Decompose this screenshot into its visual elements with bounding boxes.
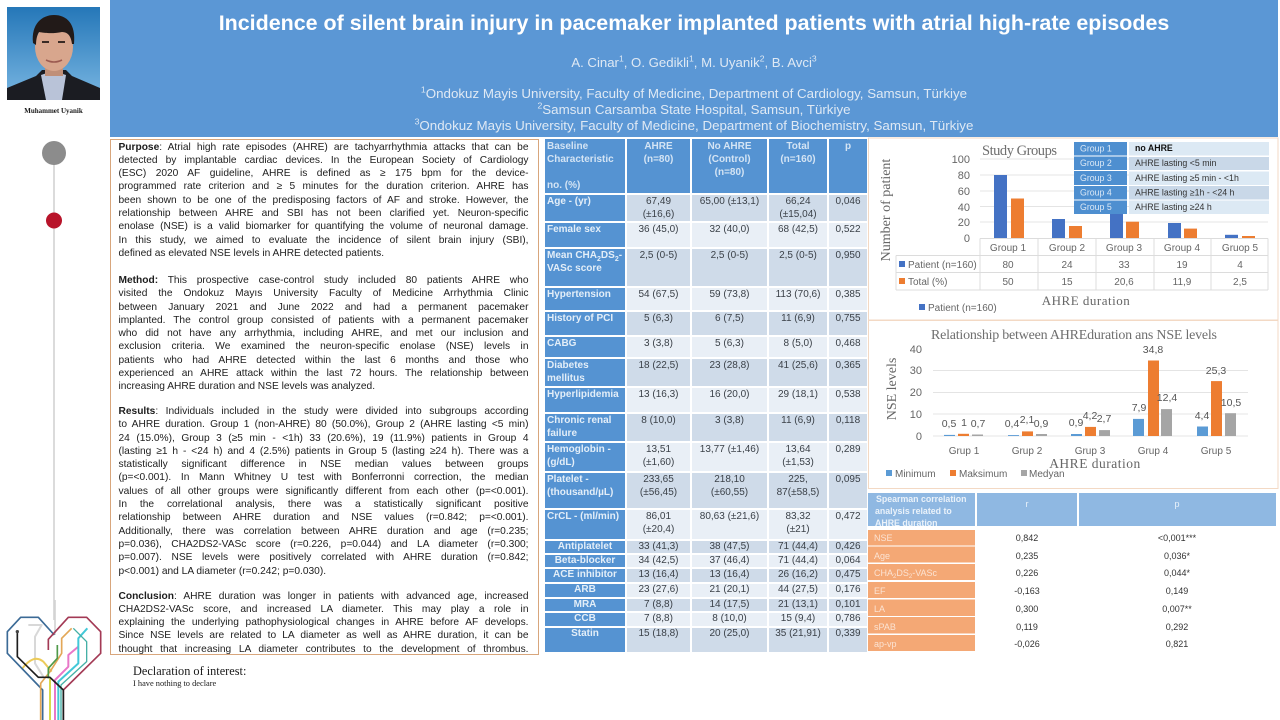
table: baseline characteristics: ARB — [574, 584, 596, 595]
table: baseline characteristics: 34 (42,5) — [638, 555, 679, 566]
r values: 0,300 — [1016, 604, 1038, 614]
text block: method: exclusion criteria. We examined the neuron-specific enolase (NSE) levels in — [118, 341, 528, 352]
table: baseline characteristics: Characteristic — [547, 154, 614, 165]
panel: study groups chart — [868, 138, 1278, 320]
text block: conclusion: Since NSE levels are related to LA diameter as well as AHRE duration, it can be — [118, 630, 528, 641]
table: baseline characteristics: 0,950 — [835, 250, 861, 261]
text block: results: Additionally, there was correlation between AHRE duration and age (r=0.235; — [118, 526, 528, 537]
declaration of interest: I have nothing to declare — [133, 679, 216, 688]
table: baseline characteristics: Baseline — [547, 141, 588, 152]
data table under chart: Group 4 — [1164, 243, 1201, 254]
table: baseline characteristics: 11 (6,9) — [781, 313, 815, 324]
text block: results: p<0.001) and LA diameter (r=0.242; p=0.030). — [118, 566, 326, 577]
data table under chart: Group 1 — [990, 243, 1027, 254]
table: baseline characteristics: 65,00 (±13,1) — [700, 196, 759, 207]
row label cells — [868, 530, 975, 651]
table header — [868, 493, 1276, 528]
p values: 0,292 — [1166, 622, 1188, 632]
text block: method: implanted. The control group consisted of patients with a permanent pacemaker — [118, 315, 528, 326]
table: baseline characteristics: 3 (3,8) — [715, 415, 744, 426]
table: baseline characteristics: 7 (8,8) — [644, 599, 673, 610]
y axis and gridlines: 30 — [910, 365, 922, 377]
table: baseline characteristics: 66,24 — [785, 196, 811, 207]
table: baseline characteristics: 26 (16,2) — [778, 569, 818, 580]
table: baseline characteristics: 29 (18,1) — [778, 389, 818, 400]
table: baseline characteristics: 68 (42,5) — [778, 224, 818, 235]
table: baseline characteristics: 8 (10,0) — [712, 613, 747, 624]
table: baseline characteristics: (±15,04) — [779, 209, 817, 220]
table: baseline characteristics: No AHRE — [707, 141, 752, 152]
text block: purpose: relationship between AHRE and SBI has not been clarified yet. Neuron-specific — [118, 208, 528, 219]
text block: results: values of all other groups were significantly different from each other (p=<0.001). — [118, 486, 528, 497]
header banner — [110, 0, 1278, 137]
affiliations: 2Samsun Carsamba State Hospital, Samsun, Türkiye — [537, 101, 851, 117]
category labels: Grup 1 — [949, 446, 980, 457]
data labels: 4,2 — [1083, 410, 1097, 422]
table: baseline characteristics: 0,426 — [835, 541, 861, 552]
table: baseline characteristics: CCB — [574, 613, 596, 624]
table: baseline characteristics: 13 (16,4) — [638, 569, 679, 580]
table: baseline characteristics: (g/dL) — [547, 457, 575, 468]
table: baseline characteristics: (n=160) — [780, 154, 816, 165]
category labels: Grup 5 — [1201, 446, 1232, 457]
table: baseline characteristics: 233,65 — [643, 474, 674, 485]
group definitions legend: Group 4 — [1080, 188, 1112, 198]
row label cells: DS — [896, 568, 909, 578]
y axis and gridlines — [952, 154, 1268, 245]
data labels: 2,1 — [1020, 414, 1034, 426]
table: baseline characteristics: Hyperlipidemia — [547, 389, 619, 400]
table: baseline characteristics: Total — [786, 141, 810, 152]
table: baseline characteristics: (±21) — [786, 524, 810, 535]
row label cells: EF — [874, 586, 886, 596]
group definitions legend: Group 3 — [1080, 173, 1112, 183]
table: baseline characteristics: (n=80) — [644, 154, 673, 165]
table: baseline characteristics: 71 (44,4) — [778, 541, 818, 552]
group definitions legend: Group 2 — [1080, 158, 1112, 168]
data labels: 34,8 — [1143, 344, 1163, 356]
affiliations — [415, 85, 973, 133]
table: baseline characteristics: 0,064 — [835, 555, 861, 566]
p values: 0,821 — [1166, 639, 1188, 649]
data table under chart: Patient (n=160) — [908, 260, 977, 271]
r values: 0,842 — [1016, 533, 1038, 543]
data labels: 0,7 — [971, 418, 985, 430]
text block: results: In the correlational analysis, there was a statistically significant positive — [118, 499, 528, 510]
table: baseline characteristics: 13,64 — [785, 444, 811, 455]
data table under chart: 11,9 — [1173, 277, 1192, 288]
table: baseline characteristics: 0,472 — [835, 511, 861, 522]
data labels: 7,9 — [1132, 402, 1146, 414]
table: baseline characteristics: 113 (70,6) — [776, 289, 820, 300]
data table under chart: 33 — [1118, 260, 1130, 271]
text block: results — [118, 406, 529, 577]
text block: conclusion: Conclusion: AHRE duration was longer in patients with advanced age, increased — [118, 590, 528, 602]
data table under chart: 80 — [1002, 260, 1014, 271]
table: baseline characteristics: 38 (47,5) — [709, 541, 750, 552]
data labels: 10,5 — [1221, 397, 1241, 409]
data table under chart: Group 2 — [1049, 243, 1086, 254]
group definitions legend: AHRE lasting ≥1h - <24 h — [1135, 188, 1235, 198]
chart legend: Minimum — [895, 469, 936, 480]
text block: results: Results: Individuals included in the study were divided into subgroups according — [118, 406, 528, 417]
text block: purpose: In this study, we aimed to evaluate the incidence of silent brain injury (SBI), — [118, 235, 528, 246]
text block: method: visited the Ondokuz Mayıs University Faculty of Medicine Arrhythmia Clinic — [118, 288, 528, 299]
table: baseline characteristics: no. (%) — [547, 180, 580, 191]
table: baseline characteristics: 87(±58,5) — [777, 487, 819, 498]
y axis and gridlines: 20 — [910, 387, 922, 399]
table: baseline characteristics: 2,5 (0-5) — [640, 250, 677, 261]
table: baseline characteristics: 0,755 — [835, 313, 861, 324]
data labels: 4,4 — [1195, 410, 1209, 422]
table: baseline characteristics: 21 (13,1) — [778, 599, 818, 610]
table: baseline characteristics: Beta-blocker — [555, 555, 615, 566]
data table under chart: 20,6 — [1114, 277, 1134, 288]
r values: 0,119 — [1016, 622, 1038, 632]
table header: Spearman correlation — [876, 494, 966, 504]
text block: conclusion — [118, 590, 528, 655]
r values: -0,163 — [1014, 586, 1040, 596]
table: baseline characteristics: 71 (44,4) — [778, 555, 818, 566]
text block: method: increasing AHRE duration and NSE levels was analyzed. — [118, 381, 375, 392]
text block: results: relationship between AHRE duration and NSE values (r=0.842; p=<0.001). — [118, 512, 528, 523]
title: Incidence of silent brain injury in pacemaker implanted patients with atrial high-rate episodes — [219, 11, 1169, 35]
x axis title: AHRE duration — [1042, 293, 1130, 308]
row label cells: NSE — [874, 533, 893, 543]
data table under chart: 15 — [1061, 277, 1073, 288]
text block: purpose: (ESC) 2020 AF guideline, AHRE is defined as ≥ 175 bpm for the device- — [118, 168, 528, 179]
text block: results: p=0.036), CHA2DS2-VASc score (r=0.226, p=0.044) and LA diameter (r=0.300; — [118, 539, 528, 550]
table: baseline characteristics: 16 (20,0) — [709, 389, 750, 400]
r values — [1014, 533, 1040, 649]
row label cells: sPAB — [874, 622, 896, 632]
table: baseline characteristics: 8 (10,0) — [641, 415, 676, 426]
chart title: Relationship between AHREduration ans NSE levels — [931, 328, 1217, 343]
table: baseline characteristics: Statin — [571, 628, 599, 639]
y axis and gridlines: 10 — [910, 409, 922, 421]
row label cells: LA — [874, 604, 885, 614]
table: baseline characteristics: 218,10 — [714, 474, 745, 485]
data labels: 25,3 — [1206, 365, 1226, 377]
text block: method: Method: This prospective case-control study included 80 patients AHRE who — [118, 275, 528, 286]
table: baseline characteristics: 83,32 — [785, 511, 811, 522]
table: baseline characteristics: 86,01 — [646, 511, 671, 522]
table: baseline characteristics: AHRE — [644, 141, 673, 152]
data table under chart — [896, 238, 1268, 290]
y axis and gridlines: 0 — [916, 431, 922, 443]
text block: purpose: enolase (NSE) is a valid biomarker for quantifying the volume of neuronal damage. — [118, 221, 528, 232]
data table under chart: Total (%) — [908, 277, 947, 288]
table: baseline characteristics: mellitus — [547, 373, 585, 384]
text block: purpose: been shown to be one of the predisposing factors of AF and stroke. However, the — [118, 195, 528, 206]
text block: results: (p=<0.001). In Mann Whitney U test with Bonferronni correction, the median — [118, 472, 528, 483]
data labels: 0,9 — [1034, 418, 1048, 430]
table: baseline characteristics: 23 (28,8) — [709, 360, 750, 371]
group definitions legend: Group 1 — [1080, 144, 1112, 154]
text block: purpose: detected by implantable cardiac devices. In the European Society of Cardiology — [118, 155, 528, 166]
bars — [944, 360, 1236, 436]
table: baseline characteristics: 14 (17,5) — [709, 599, 750, 610]
text block: method — [118, 275, 528, 392]
table: baseline characteristics: 35 (21,91) — [775, 628, 821, 639]
panel: NSE levels chart — [868, 320, 1278, 489]
group definitions legend — [1074, 142, 1269, 214]
table: baseline characteristics: Age - (yr) — [547, 196, 591, 207]
table: baseline characteristics: (Control) — [708, 154, 751, 165]
table: baseline characteristics: History of PCI — [547, 313, 613, 324]
y axis and gridlines: 100 — [952, 154, 970, 166]
text block: results: statistically significant difference in NSE median values between groups — [118, 459, 528, 470]
table: baseline characteristics: 44 (27,5) — [778, 584, 818, 595]
x axis title: AHRE duration — [1049, 456, 1141, 471]
table: baseline characteristics: (±56,45) — [640, 487, 677, 498]
table: baseline characteristics: 0,118 — [836, 415, 860, 426]
text block: conclusion: thought that increasing LA diameter contributes to the development of thrombus. — [118, 644, 528, 655]
data labels — [942, 344, 1241, 430]
text block: results: to AHRE duration. Group 1 (non-AHRE) 80 (50.0%), Group 2 (AHRE lasting <5 min) — [118, 419, 528, 430]
r values: -0,026 — [1014, 639, 1040, 649]
table: baseline characteristics: 13 (16,4) — [709, 569, 750, 580]
table: baseline characteristics: Diabetes — [547, 360, 589, 371]
table: baseline characteristics: 8 (5,0) — [784, 338, 812, 349]
table: baseline characteristics: 59 (73,8) — [709, 289, 750, 300]
group definitions legend: AHRE lasting ≥5 min - <1h — [1135, 173, 1239, 183]
table: baseline characteristics: 15 (9,4) — [781, 613, 815, 624]
icon: timeline with markers — [42, 141, 66, 620]
text block: results: (lasting ≥1 h - <24 h) and 4 (2.5%) patients in Group 5 (lasting ≥24 h). There was a — [118, 446, 528, 457]
table header: AHRE duration — [875, 518, 938, 528]
affiliations: 1Ondokuz Mayis University, Faculty of Medicine, Department of Cardiology, Samsun, Türkiye — [421, 85, 967, 101]
data labels: 12,4 — [1157, 392, 1177, 404]
data table under chart: Gruop 5 — [1222, 243, 1259, 254]
table: baseline characteristics — [545, 139, 867, 652]
category labels — [949, 446, 1232, 457]
table: baseline characteristics: 54 (67,5) — [638, 289, 679, 300]
row label cells: Age — [874, 551, 890, 561]
table: baseline characteristics: 5 (6,3) — [644, 313, 673, 324]
table: baseline characteristics: 18 (22,5) — [638, 360, 679, 371]
row label cells: 2 — [893, 574, 897, 580]
bars — [994, 175, 1255, 238]
declaration of interest — [133, 664, 246, 688]
y axis and gridlines: 0 — [964, 233, 970, 245]
y axis and gridlines: 40 — [958, 202, 970, 214]
table: baseline characteristics: 33 (41,3) — [638, 541, 679, 552]
table: baseline characteristics: 0,046 — [835, 196, 861, 207]
row label cells: -VASc — [912, 568, 938, 578]
chart legend: Medyan — [1029, 469, 1065, 480]
table: baseline characteristics: 6 (7,5) — [715, 313, 744, 324]
text block: method: between January 2021 and June 2022 and had a permanent pacemaker — [118, 302, 528, 313]
table: baseline characteristics: Antiplatelet — [558, 541, 612, 552]
table: baseline characteristics: (thousand/µL) — [547, 487, 613, 498]
text block: purpose: programmed rate criterion and ≥ 5 minutes for the duration criterion. AHRE has — [118, 181, 528, 192]
declaration of interest: Declaration of interest: — [133, 664, 246, 678]
authors: A. Cinar1, O. Gedikli1, M. Uyanik2, B. Avci3 — [571, 54, 817, 70]
data labels: 0,4 — [1005, 418, 1019, 430]
text block: method: patients who had AHRE detected within the last 6 months and those who — [118, 355, 528, 366]
text block: purpose — [118, 142, 528, 259]
table: baseline characteristics: 37 (46,4) — [709, 555, 750, 566]
table: baseline characteristics: 225, — [788, 474, 808, 485]
table: baseline characteristics: 13 (16,3) — [638, 389, 679, 400]
y axis and gridlines: 60 — [958, 186, 970, 198]
table: baseline characteristics: CrCL - (ml/min) — [547, 511, 619, 522]
table: baseline characteristics: 15 (18,8) — [638, 628, 679, 639]
chart legend — [886, 469, 1065, 480]
chart title: Study Groups — [982, 143, 1057, 159]
p values: 0,044* — [1164, 568, 1191, 578]
table: baseline characteristics: 13,51 — [646, 444, 671, 455]
icon: heart of coloured lines logo — [6, 600, 102, 720]
table: baseline characteristics: 5 (6,3) — [715, 338, 744, 349]
table: baseline characteristics: (±1,53) — [782, 457, 814, 468]
data labels: 0,5 — [942, 418, 956, 430]
table: baseline characteristics: p — [845, 141, 851, 152]
category labels: Grup 4 — [1138, 446, 1169, 457]
category labels: Grup 2 — [1012, 446, 1043, 457]
table: baseline characteristics: (±1,60) — [643, 457, 674, 468]
table: baseline characteristics: Chronic renal — [547, 415, 611, 426]
presenter name: Muhammet Uyanik — [24, 107, 83, 115]
y axis and gridlines: 40 — [910, 344, 922, 356]
chart legend: Patient (n=160) — [928, 303, 997, 314]
group definitions legend: AHRE lasting ≥24 h — [1135, 202, 1212, 212]
text block: conclusion: explaining the underlying pathophysiological changes in AHRE before AF develops. — [118, 617, 528, 628]
data labels: 1 — [961, 417, 967, 429]
table: baseline characteristics: 0,095 — [835, 474, 861, 485]
data labels: 0,9 — [1069, 417, 1083, 429]
table: baseline characteristics: 0,475 — [835, 569, 861, 580]
table: baseline characteristics: 11 (6,9) — [781, 415, 815, 426]
table: baseline characteristics: MRA — [574, 599, 596, 610]
data table under chart: Group 3 — [1106, 243, 1143, 254]
table: baseline characteristics: 32 (40,0) — [709, 224, 750, 235]
p values: 0,149 — [1166, 586, 1188, 596]
chart legend: Maksimum — [959, 469, 1007, 480]
table: baseline characteristics: 36 (45,0) — [638, 224, 679, 235]
table: baseline characteristics: Hemoglobin - — [547, 444, 611, 455]
text block: results: p=0.007). NSE levels were positively correlated with AHRE duration (r=0.842; — [118, 552, 528, 563]
table: baseline characteristics: (±20,4) — [643, 524, 674, 535]
table header: p — [1174, 499, 1180, 509]
table: baseline characteristics: 2,5 (0-5) — [779, 250, 817, 261]
table: baseline characteristics: CABG — [547, 338, 576, 349]
table: baseline characteristics: (±60,55) — [711, 487, 748, 498]
table: baseline characteristics: Platelet - — [547, 474, 589, 485]
table: baseline characteristics: 67,49 — [646, 196, 671, 207]
table: baseline characteristics: 0,101 — [835, 599, 861, 610]
table: baseline characteristics: 7 (8,8) — [644, 613, 673, 624]
table: baseline characteristics: Female sex — [547, 224, 601, 235]
text block: conclusion: CHA2DS2-VASc score, and increased LA diameter. This may play a role in — [118, 604, 528, 615]
table: baseline characteristics: Mean CHA2DS2- — [547, 250, 622, 263]
table: baseline characteristics: 13,77 (±1,46) — [700, 444, 759, 455]
table: baseline characteristics: 20 (25,0) — [709, 628, 750, 639]
p values: <0,001*** — [1158, 533, 1197, 543]
table: baseline characteristics: 3 (3,8) — [644, 338, 673, 349]
table: baseline characteristics: 0,385 — [835, 289, 861, 300]
affiliations: 3Ondokuz Mayis University, Faculty of Medicine, Department of Biochemistry, Samsun, Türkiye — [415, 117, 973, 133]
table: baseline characteristics: Hypertension — [547, 289, 611, 300]
table: baseline characteristics: 0,339 — [835, 628, 861, 639]
row label cells: 2 — [909, 574, 913, 580]
p values: 0,036* — [1164, 551, 1191, 561]
data table under chart: 4 — [1237, 260, 1243, 271]
table header: r — [1026, 499, 1028, 509]
text block: purpose: defined as elevated NSE levels in AHRE detected patients. — [118, 248, 384, 259]
table header: analysis related to — [875, 506, 952, 516]
group definitions legend: no AHRE — [1135, 143, 1173, 153]
data labels: 2,7 — [1097, 413, 1111, 425]
y axis and gridlines: 80 — [958, 170, 970, 182]
category labels: Grup 3 — [1075, 446, 1106, 457]
p values — [1158, 533, 1197, 649]
text block: method: who did not have any arrhythmia, including AHRE, and met our inclusion and — [118, 328, 528, 339]
group definitions legend: Group 5 — [1080, 202, 1112, 212]
table: baseline characteristics: 0,365 — [835, 360, 861, 371]
table: baseline characteristics: 0,786 — [835, 613, 861, 624]
y axis and gridlines — [910, 344, 1248, 443]
table: baseline characteristics: 0,522 — [835, 224, 861, 235]
table: baseline characteristics: 0,176 — [835, 584, 861, 595]
table: baseline characteristics: (n=80) — [715, 167, 744, 178]
table: baseline characteristics: 0,289 — [835, 444, 861, 455]
row label cells: ap-vp — [874, 639, 897, 649]
y axis title: Number of patient — [879, 159, 894, 261]
table: baseline characteristics: ACE inhibitor — [553, 569, 617, 580]
panel: abstract text — [110, 139, 539, 655]
table: baseline characteristics: 2,5 (0-5) — [711, 250, 748, 261]
y axis and gridlines: 20 — [958, 217, 970, 229]
table: baseline characteristics: 0,538 — [835, 389, 861, 400]
r values: 0,235 — [1016, 551, 1038, 561]
table: baseline characteristics: 41 (25,6) — [778, 360, 818, 371]
table: baseline characteristics: 23 (27,6) — [638, 584, 679, 595]
y axis title: NSE levels — [885, 358, 900, 420]
group definitions legend: AHRE lasting <5 min — [1135, 158, 1217, 168]
table: Spearman correlation analysis — [868, 493, 1276, 651]
table: baseline characteristics: 80,63 (±21,6) — [700, 511, 759, 522]
text block: method: experienced an AHRE attack within the last 72 hours. The relationship between — [118, 368, 528, 379]
table: baseline characteristics: 21 (20,1) — [709, 584, 750, 595]
text block: results: 24 (15.0%), Group 3 (≥5 min - <1h) 33 (20.6%), 19 (11.9%) patients in Group 4 — [118, 433, 528, 444]
row label cells: CHA — [874, 568, 893, 578]
table: baseline characteristics: VASc score — [547, 263, 602, 274]
table: baseline characteristics: failure — [547, 428, 577, 439]
data table under chart: 50 — [1002, 277, 1014, 288]
r values: 0,226 — [1016, 568, 1038, 578]
data table under chart: 19 — [1176, 260, 1188, 271]
data table under chart: 2,5 — [1233, 277, 1247, 288]
table: baseline characteristics: 0,468 — [835, 338, 861, 349]
p values: 0,007** — [1162, 604, 1192, 614]
table: baseline characteristics: (±16,6) — [643, 209, 674, 220]
text block: purpose: Purpose: Atrial high rate episodes (AHRE) are tachyarrhythmia attacks that can be — [118, 142, 528, 152]
photo: presenter portrait — [7, 7, 100, 100]
data table under chart: 24 — [1061, 260, 1073, 271]
